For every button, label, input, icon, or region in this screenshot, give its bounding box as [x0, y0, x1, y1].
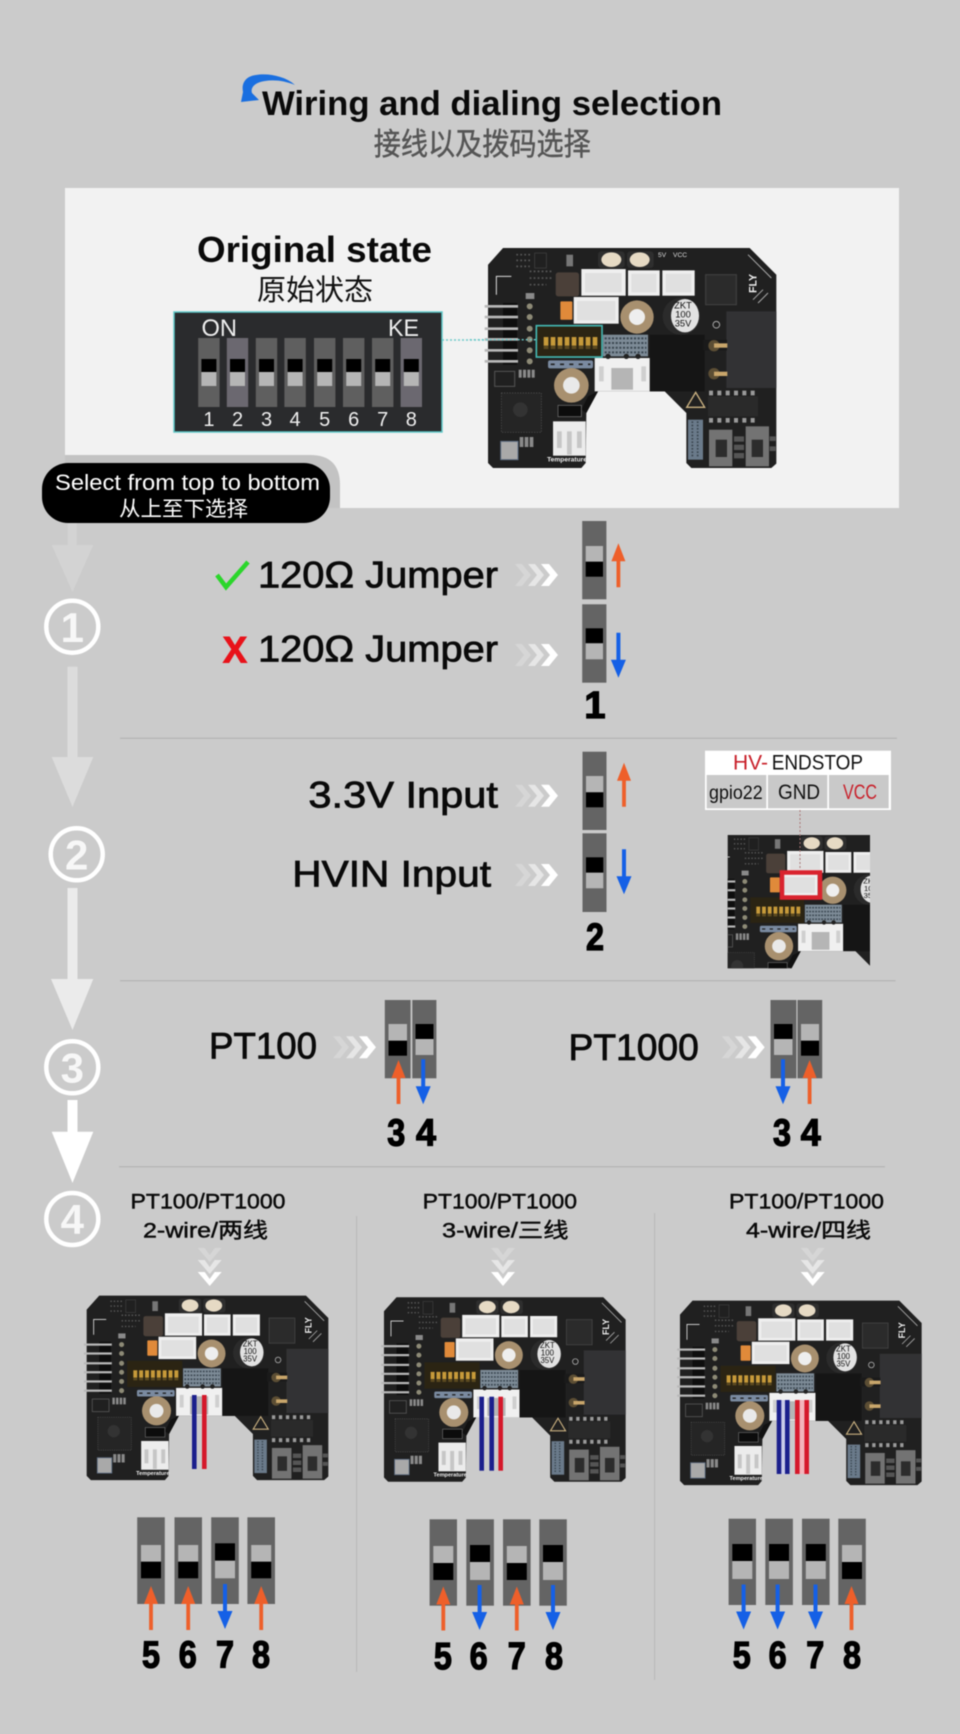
DIP switch close-up: KE [388, 315, 419, 342]
chevrons down [491, 1248, 515, 1286]
digits 3 4: 3 [387, 1112, 405, 1154]
arrows PT1000 [776, 1059, 817, 1104]
board crop with highlighted connector: 100 [864, 884, 877, 893]
arrow down [611, 633, 626, 678]
DIP switch close-up: 6 [348, 409, 359, 431]
arrow: step 1 to 2 [52, 667, 93, 807]
board crop with highlighted connector [726, 834, 871, 970]
DIP switch close-up: 3 [261, 409, 272, 431]
digits 5 6 7 8: 5 [434, 1636, 452, 1678]
section 1: 120 ohm jumper [217, 521, 626, 727]
DIP switch close-up: 2 [232, 409, 243, 431]
pinout table: HV- [733, 751, 768, 774]
switches 5 to 8 [729, 1519, 866, 1605]
chevrons down [198, 1248, 222, 1286]
label: 2-wire: PT100/PT1000 [130, 1190, 286, 1213]
board with 3 wires: Temperature [433, 1472, 467, 1478]
step number 2: 2 [65, 832, 88, 878]
pinout table: VCC [843, 781, 877, 804]
board with 2 wires: 100 [244, 1347, 257, 1356]
digits 3 4: 4 [416, 1112, 436, 1154]
board photo: main: 35V [675, 319, 692, 329]
column: 3-wire [381, 1190, 626, 1678]
callout: select from top to bottom: 从上至下选择 [119, 498, 248, 521]
chevrons down [801, 1248, 825, 1286]
digits 5 6 7 8: 7 [216, 1634, 234, 1676]
board with 2 wires: 35V [243, 1355, 258, 1364]
switch down [582, 833, 606, 912]
arrow up [617, 763, 631, 807]
board with 3 wires: 35V [540, 1356, 555, 1365]
label: jumper off: 120Ω Jumper [258, 629, 498, 670]
label: PT100: PT100 [209, 1025, 317, 1066]
label: 4-wire: 4-wire/四线 [746, 1220, 871, 1243]
board crop with highlighted connector: 35V [864, 891, 878, 900]
switch up [582, 752, 606, 830]
digits 5 6 7 8: 5 [733, 1635, 751, 1677]
digits 5 6 7 8: 8 [545, 1636, 563, 1678]
label: 2-wire: 2-wire/两线 [143, 1220, 268, 1243]
pinout table [705, 751, 891, 810]
panel: original state [65, 188, 899, 508]
DIP switch close-up: 4 [290, 409, 301, 431]
arrows [436, 1585, 560, 1630]
section 3: sensor type [209, 1000, 822, 1154]
label: HVIN input: HVIN Input [292, 854, 492, 895]
step number 4: 4 [61, 1196, 85, 1243]
label: 4-wire: PT100/PT1000 [729, 1190, 884, 1213]
chevrons [515, 785, 558, 807]
arrow: step 3 to 4 [52, 1100, 93, 1183]
board with 4 wires: FLY [897, 1322, 907, 1338]
board photo: main: Temperature [547, 457, 587, 464]
leader line to connector [799, 810, 801, 870]
board with 2 wires: Temperature [136, 1471, 170, 1477]
board photo: main [470, 248, 776, 468]
chevrons [333, 1036, 376, 1058]
board photo: main: VCC [673, 252, 687, 259]
switch up [582, 521, 606, 599]
step number 4 [46, 1193, 98, 1245]
digits 5 6 7 8 [434, 1636, 563, 1678]
step number 3 [46, 1041, 98, 1093]
tab behind pill [65, 455, 340, 508]
label: 3-wire: 3-wire/三线 [442, 1220, 568, 1243]
digits 5 6 7 8: 7 [508, 1636, 526, 1678]
heading: original state: Original state [197, 229, 432, 270]
board with 4 wires: 100 [837, 1352, 851, 1361]
board with 3 wires: 100 [541, 1349, 555, 1358]
arrows PT100 [392, 1059, 431, 1104]
board photo: main: FLY [747, 274, 759, 293]
arrows [144, 1584, 268, 1630]
digits 3 4: 3 [773, 1112, 791, 1154]
switches 5 to 8 [137, 1517, 275, 1604]
board photo: main: 5V [658, 252, 667, 259]
board with 2 wires [84, 1296, 328, 1480]
switch down [582, 604, 606, 683]
board with 2 wires: ZKT [243, 1340, 258, 1349]
DIP switch close-up: 5 [319, 409, 330, 431]
board with 3 wires: FLY [601, 1319, 611, 1335]
label: 3-wire: PT100/PT1000 [423, 1190, 577, 1213]
title: Wiring and dialing selection [262, 85, 722, 123]
board with 2 wires: FLY [304, 1317, 314, 1333]
dashed leader line [442, 339, 540, 341]
label: jumper on: 120Ω Jumper [258, 554, 498, 595]
arrows [736, 1584, 858, 1630]
board with 3 wires [381, 1297, 626, 1482]
label: 3-wire [423, 1190, 577, 1243]
pinout table: GND [778, 781, 820, 804]
DIP switch close-up: 1 [203, 409, 214, 431]
arrow: flow into step 1 [52, 523, 93, 592]
label: PT1000: PT1000 [568, 1027, 699, 1068]
subtitle: 接线以及拨码选择 [374, 127, 591, 162]
DIP switch close-up: 7 [377, 409, 388, 431]
digits 5 6 7 8: 6 [769, 1635, 787, 1677]
icon: green check [217, 562, 248, 587]
step number 2 [51, 828, 103, 880]
step number 1: 1 [61, 604, 84, 651]
board with 3 wires: ZKT [540, 1341, 555, 1350]
section 2: input voltage [294, 750, 892, 970]
switches 3 and 4: PT1000 [770, 1000, 822, 1078]
board crop with highlighted connector: ZKT [863, 876, 878, 885]
digits 5 6 7 8 [142, 1634, 270, 1676]
pinout table: ENDSTOP [772, 751, 863, 774]
icon: curved blue arrow [241, 74, 295, 102]
switches 3 and 4: PT100 [385, 1000, 436, 1078]
switches 5 to 8 [430, 1519, 567, 1606]
board photo: main: ZKT [674, 301, 692, 311]
switch number 2: 2 [586, 917, 604, 959]
digits 3 4 [773, 1112, 821, 1154]
arrow: step 2 to 3 [51, 888, 93, 1030]
icon: red x: x [222, 618, 248, 674]
label: 4-wire [729, 1190, 884, 1243]
board with 4 wires: Temperature [729, 1476, 763, 1482]
digits 5 6 7 8 [733, 1635, 861, 1677]
board photo: main: 100 [675, 310, 691, 320]
arrow up [611, 543, 625, 587]
digits 5 6 7 8: 7 [806, 1635, 824, 1677]
step number 3: 3 [61, 1044, 84, 1092]
switch number 1: 1 [584, 685, 606, 727]
DIP switch close-up [174, 312, 442, 432]
digits 5 6 7 8: 6 [179, 1634, 197, 1676]
callout: select from top to bottom [42, 463, 330, 523]
callout: select from top to bottom: Select from top to bottom [55, 470, 320, 495]
label: 3.3V input: 3.3V Input [308, 774, 499, 815]
digits 3 4: 4 [801, 1112, 821, 1154]
DIP switch close-up: 8 [406, 409, 417, 431]
digits 5 6 7 8: 8 [252, 1634, 270, 1676]
board with 4 wires: ZKT [836, 1345, 851, 1354]
digits 5 6 7 8: 6 [470, 1636, 488, 1678]
digits 5 6 7 8: 5 [142, 1634, 160, 1676]
board with 4 wires [677, 1301, 922, 1485]
heading: original state chinese: 原始状态 [257, 274, 373, 307]
arrow down [616, 849, 632, 894]
pinout table: gpio22 [709, 783, 763, 804]
column: 4-wire [677, 1190, 922, 1677]
step number 1 [46, 601, 98, 653]
chevrons [722, 1036, 765, 1058]
column: 2-wire [84, 1190, 328, 1676]
chevrons [515, 564, 558, 586]
chevrons [515, 644, 558, 666]
digits 5 6 7 8: 8 [843, 1635, 861, 1677]
digits 3 4 [387, 1112, 436, 1154]
chevrons [515, 864, 558, 886]
board with 4 wires: 35V [836, 1360, 851, 1369]
DIP switch close-up: ON [202, 315, 237, 342]
label: 2-wire [130, 1190, 286, 1243]
